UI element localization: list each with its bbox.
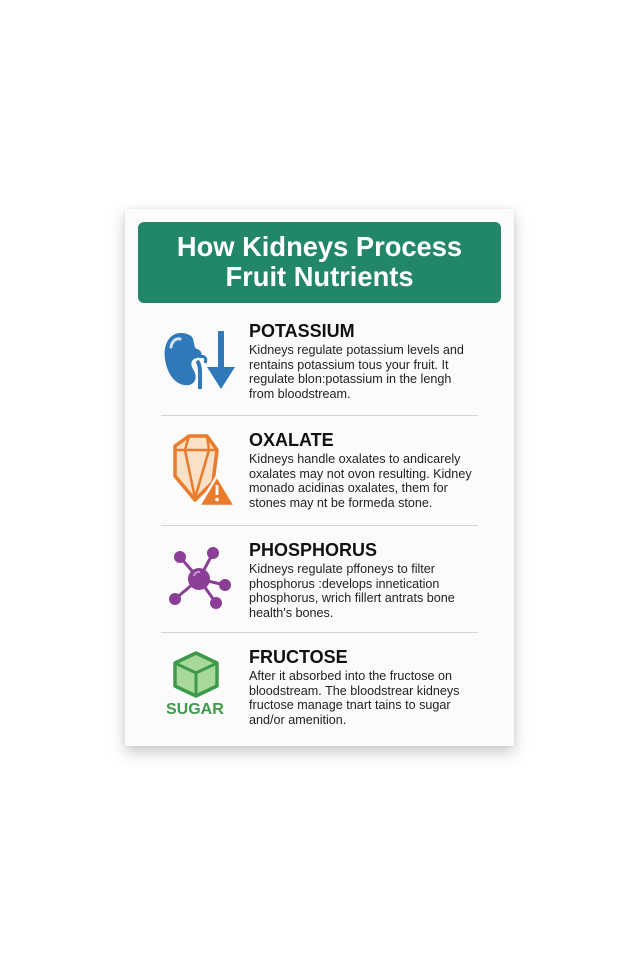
section: fructose: FRUCTOSE (249, 647, 348, 667)
section: phosphorus: phosphorus, wrich fillert antrats bone (249, 591, 455, 605)
section: potassium: from bloodstream. (249, 387, 350, 401)
icon: molecule (169, 547, 231, 609)
section: potassium: POTASSIUM (249, 321, 355, 341)
section: oxalate: stones may nt be formeda stone. (249, 496, 432, 510)
section: fructose: fructose manage tnart tains to sugar (249, 698, 451, 712)
section: potassium: rentains potassium tous your fruit. It (249, 358, 448, 372)
icon: kidney with down arrow (164, 331, 235, 389)
section: oxalate: Kidneys handle oxalates to andicarely (249, 452, 460, 466)
title banner (138, 222, 501, 303)
section: oxalate: OXALATE (249, 430, 334, 450)
section: oxalate: monado acidinas oxalates, them for (249, 481, 448, 495)
section: fructose: bloodstream. The bloodstrear kidneys (249, 684, 459, 698)
section: fructose: and/or amenition. (249, 713, 346, 727)
section: phosphorus: phosphorus :develops innetication (249, 577, 439, 591)
section: phosphorus: PHOSPHORUS (249, 540, 377, 560)
section: fructose: After it absorbed into the fructose on (249, 669, 452, 683)
section: potassium: Kidneys regulate potassium levels and (249, 343, 464, 357)
title banner: How Kidneys Process (177, 231, 462, 262)
icon: sugar cube (166, 651, 224, 718)
section: phosphorus: health's bones. (249, 606, 333, 620)
icon: sugar cube: SUGAR (166, 701, 224, 718)
section: fructose (249, 647, 459, 727)
section: potassium: regulate blon:potassium in the lengh (249, 372, 451, 386)
section: phosphorus (249, 540, 455, 620)
section: phosphorus: Kidneys regulate pffoneys to filter (249, 562, 435, 576)
card (125, 209, 514, 746)
title banner: Fruit Nutrients (225, 261, 414, 292)
section: oxalate: oxalates may not ovon resulting. Kidney (249, 467, 472, 481)
icon: crystal with warning (173, 434, 233, 505)
section: potassium (249, 321, 464, 401)
section: oxalate (249, 430, 472, 510)
